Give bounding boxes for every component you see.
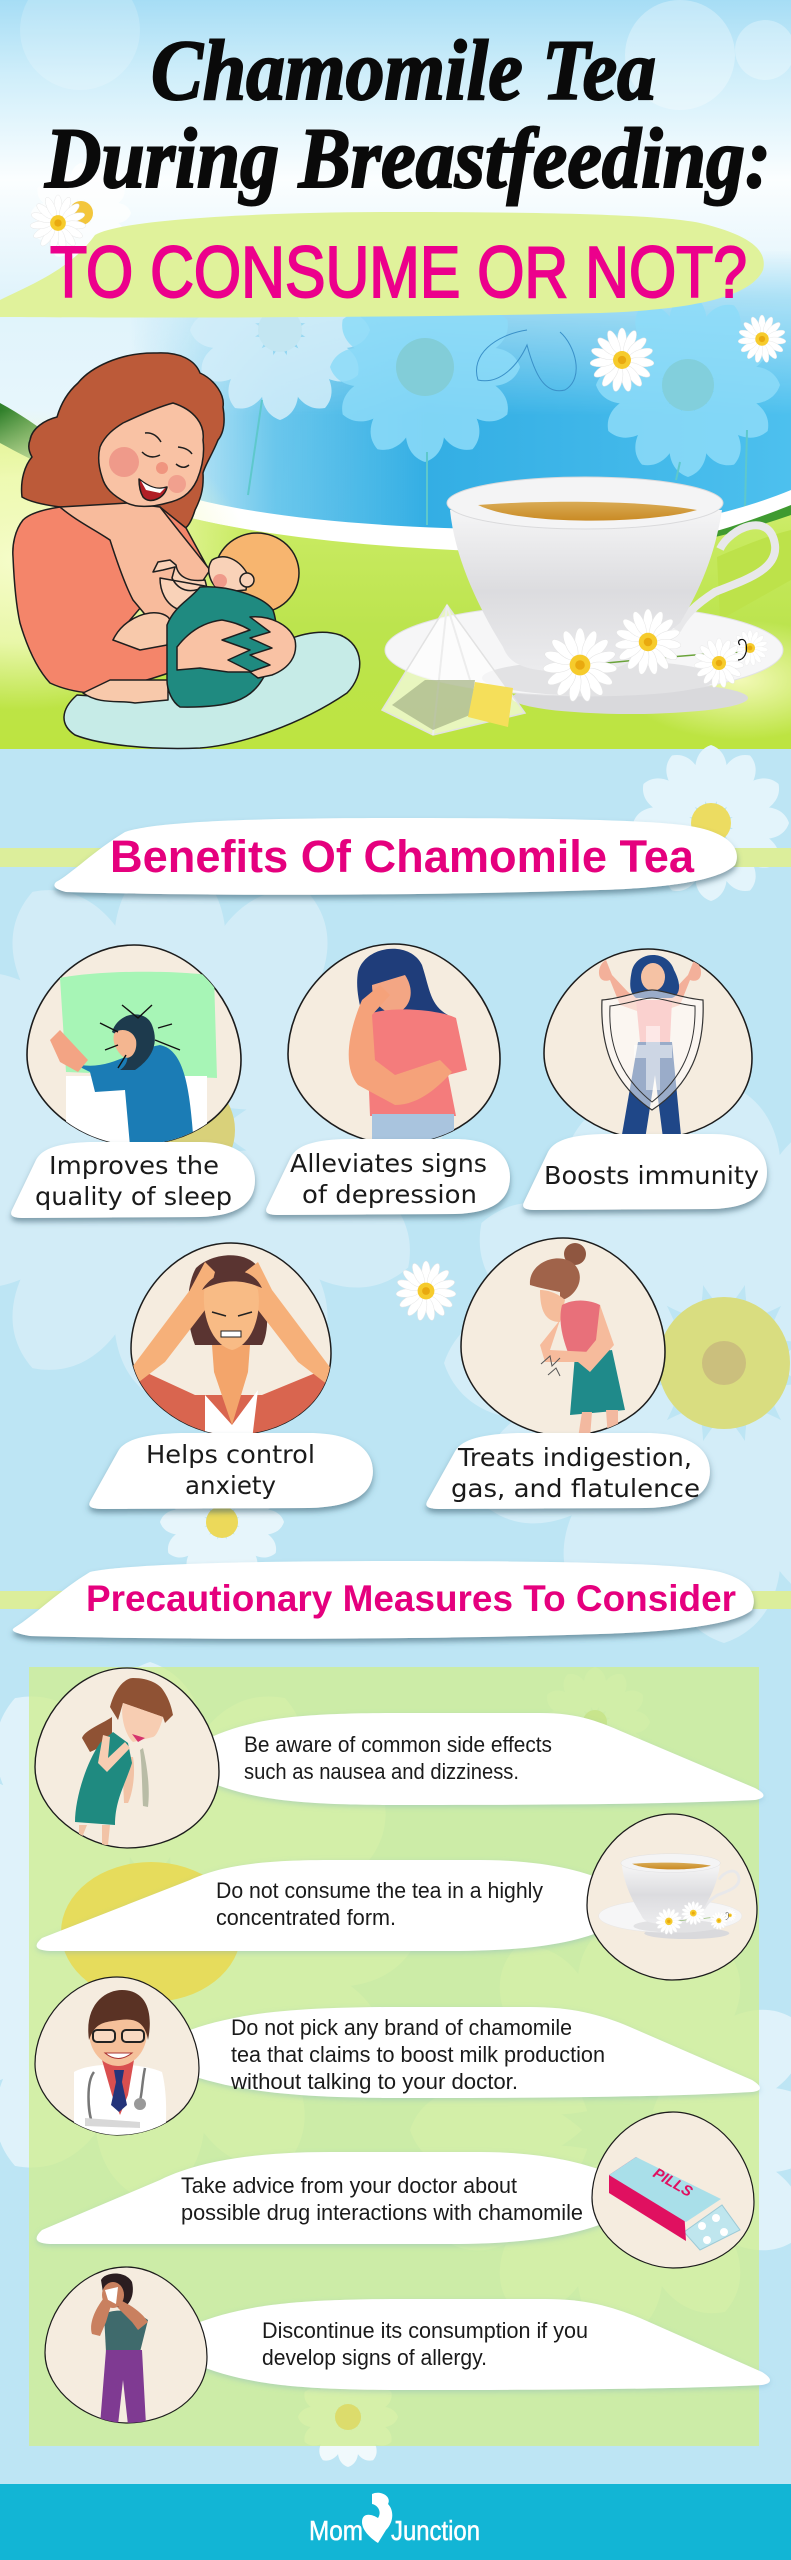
benefit: indigestion: [426, 1238, 710, 1509]
section stripe: benefits: [0, 848, 791, 867]
label: sleep: [11, 1142, 255, 1218]
bubble: allergy: develop signs of allergy.: [262, 2345, 487, 2370]
baby head: [215, 533, 299, 613]
precaution 1: side effects: [35, 1668, 764, 1848]
title: Chamomile Tea: [151, 22, 656, 118]
label: indigestion: gas, and flatulence: [451, 1474, 700, 1503]
icon: pills box: PILLS: [650, 2165, 695, 2201]
section stripe: precautions: [0, 1591, 791, 1609]
label: anxiety: [89, 1433, 373, 1509]
logo: MomJunction: [309, 2493, 480, 2546]
illustration: mother breastfeeding baby: [13, 353, 360, 748]
background flowers: benefits section: [0, 745, 791, 1643]
face: [99, 403, 204, 506]
bubble: drug interactions: [37, 2152, 607, 2244]
heading: precautions: Precautionary Measures To Consider: [86, 1578, 736, 1619]
benefit: depression: [266, 944, 510, 1215]
mother's hands: [177, 620, 252, 672]
bubble: concentrated form: [37, 1860, 604, 1951]
bubble: drug interactions: possible drug interactions with chamomile: [181, 2200, 583, 2225]
label: sleep: Improves the: [49, 1151, 219, 1180]
illustration: sad woman: [288, 944, 500, 1144]
benefit: anxiety: [89, 1243, 373, 1509]
precaution 3: milk production claims: [35, 1977, 760, 2140]
bubble: milk production claims: tea that claims to boost milk production: [231, 2042, 605, 2067]
bubble: milk production claims: [190, 2007, 760, 2098]
bubble: side effects: [205, 1713, 764, 1805]
label: depression: of depression: [302, 1180, 477, 1209]
title: [44, 22, 771, 206]
label: anxiety: anxiety: [185, 1471, 276, 1500]
handle: [677, 525, 775, 630]
cup body: [450, 510, 722, 673]
hero background scene: [0, 0, 791, 749]
nursing pillow: [64, 632, 360, 748]
bubble: side effects: such as nausea and dizziness.: [244, 1759, 519, 1784]
subtitle banner: [0, 212, 764, 318]
bubble: side effects: Be aware of common side effects: [244, 1732, 552, 1757]
heading: benefits: [54, 818, 737, 895]
illustration: woman sleeping: [27, 945, 241, 1146]
bubble: concentrated form: concentrated form.: [216, 1905, 396, 1930]
label: indigestion: Treats indigestion,: [457, 1443, 692, 1472]
hair: [22, 353, 224, 528]
baby suit: [167, 587, 276, 707]
sweater: [13, 507, 210, 693]
label: immunity: [523, 1134, 767, 1210]
baby lower body and leg: [83, 680, 168, 703]
logo: MomJunction: Mom: [309, 2515, 363, 2546]
icon: pills box: [592, 2112, 754, 2268]
label: indigestion: [426, 1433, 710, 1509]
bubble: milk production claims: without talking to your doctor.: [230, 2069, 518, 2094]
label: depression: Alleviates signs: [290, 1149, 487, 1178]
bubble: drug interactions: Take advice from your doctor about: [181, 2173, 517, 2198]
label: sleep: quality of sleep: [35, 1182, 232, 1211]
bubble: concentrated form: Do not consume the tea in a highly: [216, 1878, 543, 1903]
logo: MomJunction: Junction: [391, 2515, 480, 2546]
icon: sky daisies: [590, 315, 786, 392]
icon: tea cup: [587, 1814, 757, 1980]
bubble: allergy: Discontinue its consumption if you: [262, 2318, 588, 2343]
label: immunity: Boosts immunity: [544, 1161, 759, 1190]
precaution 4: drug interactions: [37, 2112, 754, 2268]
icon: doctor: [35, 1977, 199, 2140]
baby arm: [153, 560, 210, 610]
heading: precautions: [13, 1561, 754, 1639]
heading: benefits: Benefits Of Chamomile Tea: [110, 831, 695, 882]
icon: daisies near title: [30, 163, 131, 263]
benefit: immunity: [523, 949, 767, 1210]
saucer: [512, 682, 748, 714]
illustration: anxious woman: [130, 1243, 335, 1440]
icon: nauseous girl: [35, 1668, 219, 1848]
benefit: sleep: [11, 945, 255, 1218]
precaution 5: allergy: [45, 2267, 770, 2425]
bubble: allergy: [200, 2299, 770, 2390]
illustration: pyramid tea bag: [382, 605, 525, 735]
precaution 2: concentrated form: [37, 1814, 757, 1980]
label: anxiety: Helps control: [146, 1440, 315, 1469]
label: depression: [266, 1139, 510, 1215]
illustration: strong woman with shield: [544, 949, 752, 1146]
bubble: milk production claims: Do not pick any brand of chamomile: [231, 2015, 572, 2040]
panel: precautionary measures: [29, 1667, 759, 2446]
illustration: woman holding stomach: [461, 1238, 665, 1438]
chest: [60, 503, 210, 630]
background flowers: precautions section: [0, 1662, 791, 2467]
illustration: tea cup with saucer and daisies: [385, 477, 783, 714]
footer bar: [0, 2484, 791, 2560]
icon: woman sneezing: [45, 2267, 207, 2425]
